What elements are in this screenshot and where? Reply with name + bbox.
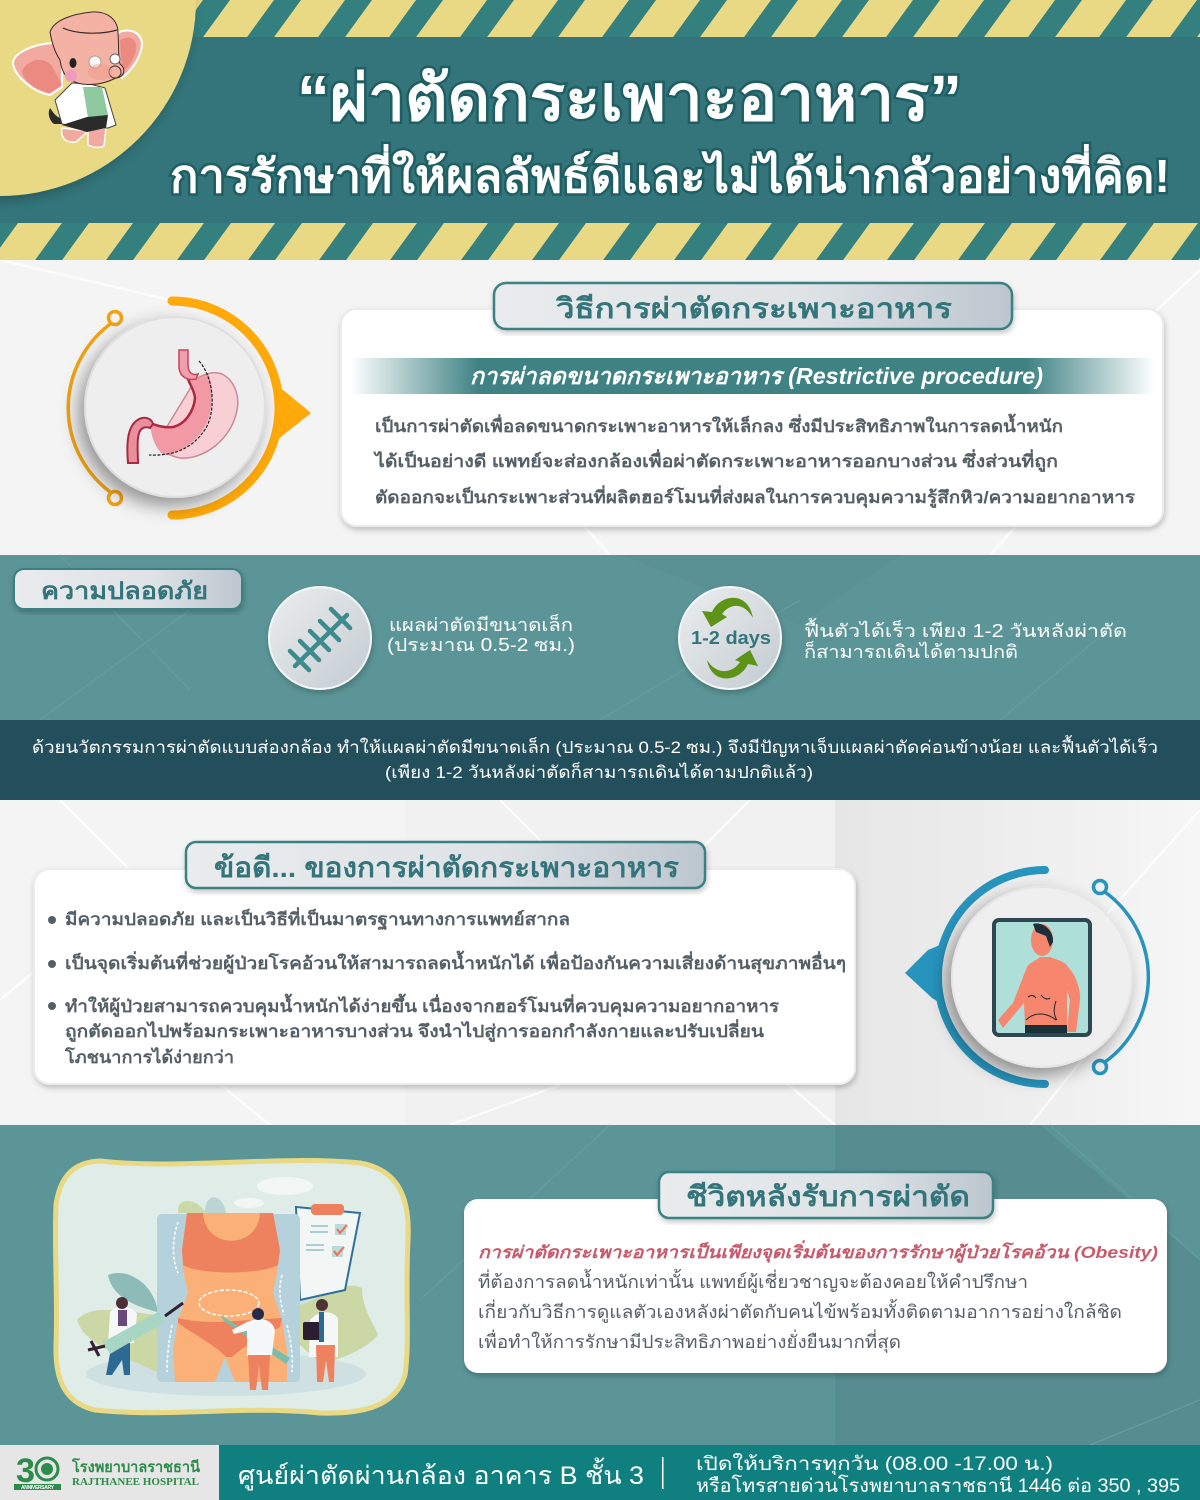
mascot: elephant doctor xyxy=(13,12,142,147)
icon: 1-2 days recovery xyxy=(679,587,781,689)
heading pill xyxy=(659,1172,993,1218)
bullet 2 xyxy=(48,950,846,975)
illustration: body and doctors xyxy=(77,1177,378,1396)
heading text: ข้อดี... ของการผ่าตัดกระเพาะอาหาร xyxy=(214,852,679,883)
recovery text xyxy=(804,618,1127,662)
icon: small incision xyxy=(269,587,371,689)
body panel xyxy=(157,1213,300,1382)
safety heading text: ความปลอดภัย xyxy=(41,578,208,605)
hospital logo: ANNIVERSARY xyxy=(21,1485,55,1491)
bullet 2: เป็นจุดเริ่มต้นที่ช่วยผู้ป่วยโรคอ้วนให้สามารถลดน้ำหนักได้ เพื่อป้องกันความเสี่ยงด้านสุขภาพอื่นๆ xyxy=(65,950,846,975)
location text: ศูนย์ผ่าตัดผ่านกล้อง อาคาร B ชั้น 3 xyxy=(238,1457,644,1491)
yellow corner xyxy=(0,0,196,196)
panel: surgery method xyxy=(341,283,1163,526)
card xyxy=(464,1199,1167,1373)
footer xyxy=(0,1445,1200,1500)
bullet 3 xyxy=(48,993,780,1067)
right doctor xyxy=(303,1299,338,1382)
opening hours text xyxy=(696,1453,1180,1497)
heading pill xyxy=(186,842,705,888)
body text: ได้เป็นอย่างดี แพทย์จะส่องกล้องเพื่อผ่าตัดกระเพาะอาหารออกบางส่วน ซึ่งส่วนที่ถูก xyxy=(373,449,1058,473)
banner: dark summary: ด้วยนวัตกรรมการผ่าตัดแบบส่องกล้อง ทำให้แผลผ่าตัดมีขนาดเล็ก (ประมาณ 0.5-2 ซม.) จึงมีปัญหาเจ็บแผลผ่าตัดค่อนข้างน้อย และฟื้นตัวได้เร็ว xyxy=(32,735,1158,757)
header band xyxy=(0,0,1200,260)
incision text xyxy=(387,613,575,655)
banner: dark summary: (เพียง 1-2 วันหลังผ่าตัดก็สามารถเดินได้ตามปกติแล้ว) xyxy=(385,761,813,782)
title xyxy=(170,62,1170,202)
icon: patient in tablet xyxy=(905,870,1148,1084)
body text: เกี่ยวกับวิธีการดูแลตัวเองหลังผ่าตัดกับคนไข้พร้อมทั้งติดตามอาการอย่างใกล้ชิด xyxy=(478,1299,1122,1323)
bullet 1: มีความปลอดภัย และเป็นวิธีที่เป็นมาตรฐานทางการแพทย์สากล xyxy=(65,907,570,931)
banner: dark summary xyxy=(0,720,1200,800)
body text: ตัดออกจะเป็นกระเพาะส่วนที่ผลิตฮอร์โมนที่ส่งผลในการควบคุมความรู้สึกหิว/ความอยากอาหาร xyxy=(375,485,1136,509)
incision text: (ประมาณ 0.5-2 ซม.) xyxy=(387,635,575,655)
panel: safety xyxy=(0,555,1200,720)
safety heading pill xyxy=(14,569,242,609)
recovery text: ฟื้นตัวได้เร็ว เพียง 1-2 วันหลังผ่าตัด xyxy=(804,618,1127,641)
subheading bar xyxy=(350,358,1155,394)
icon: stomach in circle xyxy=(68,301,311,515)
recovery text: ก็สามารถเดินได้ตามปกติ xyxy=(804,640,1018,662)
icon: 1-2 days recovery: 1-2 days xyxy=(691,628,771,648)
bullet 1 xyxy=(48,907,570,931)
body text: เพื่อทำให้การรักษามีประสิทธิภาพอย่างยั่งยืนมากที่สุด xyxy=(478,1329,901,1353)
title line 2: การรักษาที่ให้ผลลัพธ์ดีและไม่ได้น่ากลัวอย่างที่คิด! xyxy=(170,144,1170,202)
body text xyxy=(478,1269,1122,1353)
panel: benefits xyxy=(34,842,855,1084)
hospital logo xyxy=(0,1445,219,1500)
bullet 3: ถูกตัดออกไปพร้อมกระเพาะอาหารบางส่วน จึงนำไปสู่การออกกำลังกายและปรับเปลี่ยน xyxy=(65,1019,764,1043)
body text: ที่ต้องการลดน้ำหนักเท่านั้น แพทย์ผู้เชี่ยวชาญจะต้องคอยให้คำปรึกษา xyxy=(478,1269,1028,1293)
bullet 3: ทำให้ผู้ป่วยสามารถควบคุมน้ำหนักได้ง่ายขึ้น เนื่องจากฮอร์โมนที่ควบคุมความอยากอาหาร xyxy=(65,993,780,1018)
subheading text: การผ่าลดขนาดกระเพาะอาหาร (Restrictive procedure) xyxy=(470,363,1043,389)
incision text: แผลผ่าตัดมีขนาดเล็ก xyxy=(389,613,573,635)
title line 1: “ผ่าตัดกระเพาะอาหาร” xyxy=(297,62,962,134)
plants xyxy=(77,1197,378,1372)
highlighted text: การผ่าตัดกระเพาะอาหารเป็นเพียงจุดเริ่มต้นของการรักษาผู้ป่วยโรคอ้วน (Obesity) xyxy=(478,1240,1158,1263)
body text: เป็นการผ่าตัดเพื่อลดขนาดกระเพาะอาหารให้เล็กลง ซึ่งมีประสิทธิภาพในการลดน้ำหนัก xyxy=(375,413,1063,436)
heading text: ชีวิตหลังรับการผ่าตัด xyxy=(686,1181,970,1212)
heading text: วิธีการผ่าตัดกระเพาะอาหาร xyxy=(554,293,952,324)
heading pill xyxy=(494,283,1012,329)
illustration frame xyxy=(55,1161,408,1413)
bullet 3: โภชนาการได้ง่ายกว่า xyxy=(64,1047,234,1067)
hospital logo: โรงพยาบาลราชธานี xyxy=(71,1457,201,1476)
opening hours text: เปิดให้บริการทุกวัน (08.00 -17.00 น.) xyxy=(696,1453,1053,1476)
panel: life after surgery xyxy=(0,1125,1200,1445)
card xyxy=(341,309,1163,526)
opening hours text: หรือโทรสายด่วนโรงพยาบาลราชธานี 1446 ต่อ 350 , 395 xyxy=(696,1474,1180,1497)
body text xyxy=(373,413,1136,509)
card xyxy=(34,869,855,1084)
middle doctor xyxy=(220,1308,290,1390)
left doctor with syringe xyxy=(88,1297,183,1375)
hospital logo: RAJTHANEE HOSPITAL xyxy=(72,1476,199,1488)
clipboard xyxy=(296,1204,360,1300)
hospital logo: 3 xyxy=(16,1452,35,1490)
clouds xyxy=(234,1177,313,1208)
